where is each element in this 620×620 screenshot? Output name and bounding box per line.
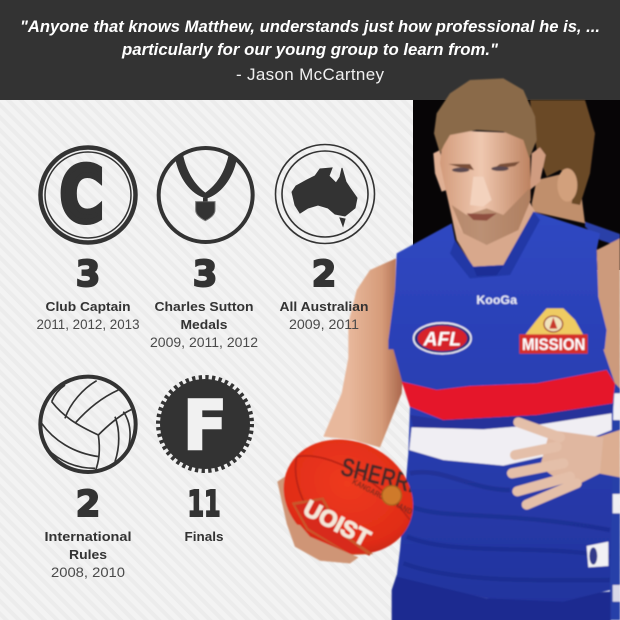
stat: Finals [184, 484, 224, 544]
quote line 2: particularly for our young group to learn from." [121, 41, 498, 59]
icon: Australia map [276, 144, 374, 244]
icon: finals badge [158, 378, 252, 470]
mouth [467, 213, 497, 221]
stat: club captain: 2011, 2012, 2013 [36, 316, 140, 332]
left forearm [323, 349, 403, 447]
stat: club captain [36, 254, 140, 332]
stat: Finals: Finals [184, 529, 224, 544]
teammate behind [530, 100, 620, 247]
hair [434, 78, 537, 158]
stat: Charles Sutton Medals [150, 254, 258, 350]
fingers on ball [287, 523, 358, 563]
icon: finals badge: F [183, 385, 227, 465]
right upper arm [603, 349, 620, 388]
icon: captain C badge [40, 148, 136, 242]
stat: International Rules [44, 484, 132, 580]
football: KANGAROO BRAND [351, 477, 414, 516]
Mission logo [519, 308, 588, 354]
brows and eyes [448, 162, 520, 172]
navy stripe [410, 403, 613, 429]
jersey patch [587, 542, 608, 567]
neck [452, 197, 535, 267]
right shoulder [597, 238, 620, 362]
dark tunnel behind player [413, 100, 620, 270]
nose [470, 177, 492, 207]
jersey lower [393, 349, 615, 602]
football: UOIST [299, 495, 375, 551]
hand under ball [277, 473, 358, 563]
stat: All Australian [280, 254, 369, 332]
AFL logo: AFL [423, 330, 461, 351]
football: SHERRIN [338, 451, 432, 502]
player photo illustration [265, 78, 620, 620]
stat: Charles Sutton Medals: Charles Sutton [154, 299, 254, 314]
quote attribution: - Jason McCartney [236, 65, 384, 84]
stat: club captain: Club Captain [46, 299, 131, 314]
red stripe [402, 370, 615, 420]
jersey upper [388, 212, 607, 362]
stat: All Australian: 2 [312, 254, 336, 295]
right ear [530, 147, 546, 190]
football [282, 438, 414, 557]
stat: All Australian: All Australian [280, 299, 369, 314]
stat: International Rules: International [44, 529, 132, 544]
stat: International Rules: 2008, 2010 [51, 564, 125, 580]
stat: All Australian: 2009, 2011 [289, 316, 359, 332]
header band [0, 0, 620, 100]
right forearm and hand [512, 422, 620, 505]
stat: Charles Sutton Medals: 3 [193, 254, 217, 295]
teammate jersey right [610, 383, 620, 620]
left shoulder [348, 258, 398, 362]
collar [450, 212, 540, 278]
upper body and head [348, 78, 620, 362]
face [440, 130, 531, 245]
shorts [392, 575, 611, 620]
white stripe [409, 413, 612, 466]
stat: Charles Sutton Medals: 2009, 2011, 2012 [150, 334, 258, 350]
stat: Finals: 11 [187, 484, 221, 525]
stat: Charles Sutton Medals: Medals [180, 317, 228, 332]
AFL logo [414, 323, 471, 354]
lower body [265, 349, 620, 620]
KooGa logo: KooGa [476, 293, 517, 307]
stat: club captain: 3 [76, 254, 100, 295]
stubble [452, 188, 531, 245]
jersey logos [414, 293, 588, 354]
stat: International Rules: Rules [69, 547, 107, 562]
icon: captain C badge: C [60, 152, 104, 240]
icon: volleyball [40, 377, 136, 472]
icon: medal [159, 148, 253, 242]
stat: International Rules: 2 [76, 484, 100, 525]
shirt folds [403, 472, 610, 580]
quote heading [20, 18, 600, 84]
left ear [433, 150, 447, 192]
quote line 1: "Anyone that knows Matthew, understands just how professional he is, ... [20, 18, 600, 36]
Mission logo: MISSION [522, 335, 585, 354]
